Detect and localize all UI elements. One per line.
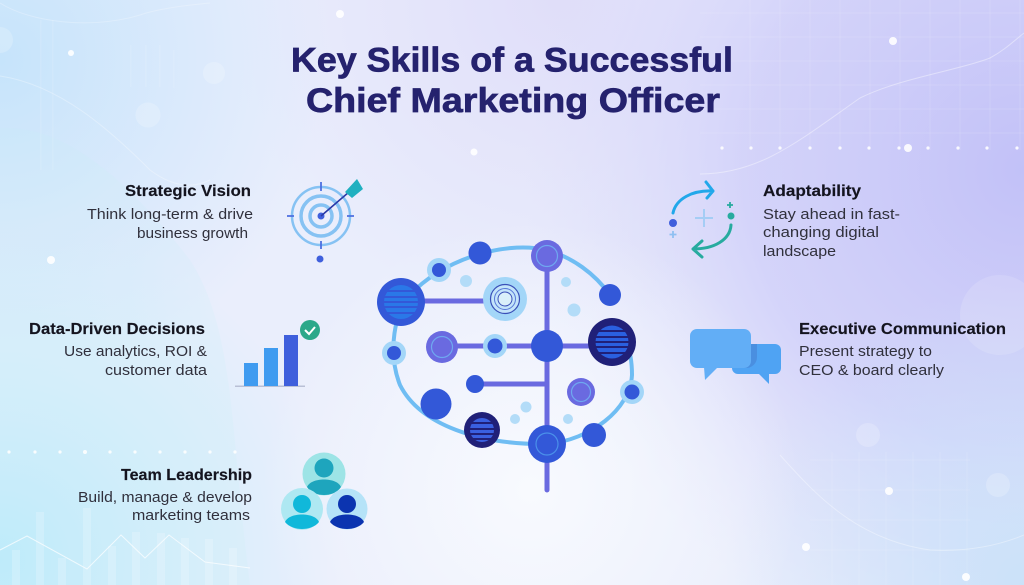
skill: Strategic Vision: Strategic Vision	[125, 183, 251, 200]
skill: Team Leadership	[78, 467, 252, 524]
ringed small nodes	[382, 258, 644, 404]
striped node left	[377, 278, 425, 326]
skill: Executive Communication: CEO & board clearly	[799, 363, 945, 379]
title: Chief Marketing Officer	[306, 82, 720, 120]
skill: Adaptability: landscape	[763, 244, 836, 260]
striped dark node right	[588, 318, 636, 366]
skill: Adaptability	[763, 183, 900, 260]
target node	[483, 277, 527, 321]
icon: team of three people	[281, 452, 368, 530]
skill: Strategic Vision: Think long-term & drive	[87, 207, 253, 223]
skill: Data-Driven Decisions	[29, 321, 208, 379]
skill: Executive Communication: Executive Communication	[799, 321, 1006, 338]
skill: Strategic Vision: business growth	[137, 226, 248, 242]
title	[291, 42, 733, 120]
icon: target with arrow	[287, 179, 363, 262]
skill: Adaptability: Stay ahead in fast-	[763, 207, 900, 223]
skill: Adaptability: changing digital	[763, 225, 879, 241]
icon: speech bubbles	[690, 329, 781, 384]
outer ring	[393, 248, 632, 444]
skill: Team Leadership: marketing teams	[132, 508, 250, 524]
icon: circular arrows	[669, 182, 734, 257]
bottom hub node	[528, 425, 566, 463]
light dots	[460, 275, 580, 424]
title: Key Skills of a Successful	[291, 42, 733, 80]
skill: Team Leadership: Build, manage & develop	[78, 490, 252, 506]
skill: Data-Driven Decisions: Use analytics, ROI &	[64, 344, 207, 360]
skill: Data-Driven Decisions: Data-Driven Decisions	[29, 321, 205, 338]
skill: Adaptability: Adaptability	[763, 183, 861, 200]
striped dark node bottom	[464, 412, 500, 448]
connector lines	[401, 256, 612, 490]
skill: Team Leadership: Team Leadership	[121, 467, 252, 484]
central brain network diagram	[377, 240, 644, 490]
skill: Executive Communication: Present strategy to	[799, 344, 932, 360]
purple nodes	[426, 240, 595, 406]
skill: Data-Driven Decisions: customer data	[105, 363, 208, 379]
icon: bar chart with check	[235, 320, 320, 387]
skill: Strategic Vision	[87, 183, 253, 242]
skill: Executive Communication	[799, 321, 1006, 379]
blue nodes	[420, 242, 621, 447]
